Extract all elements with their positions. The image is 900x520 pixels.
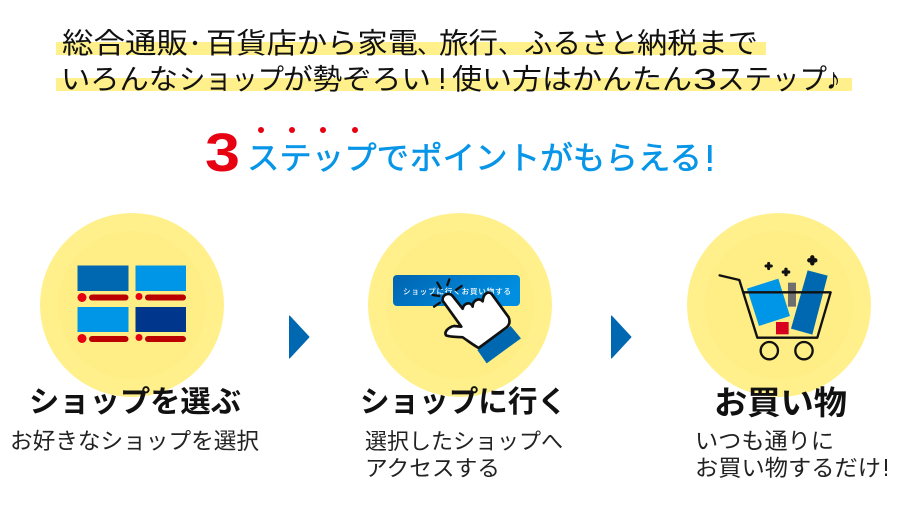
intro text with yellow highlights: 3 (693, 64, 717, 96)
intro text with yellow highlights: ステップ (717, 64, 827, 96)
intro text with yellow highlights: ショップ (179, 64, 284, 96)
icon: shopping cart (720, 257, 831, 359)
step 2 description: アクセスする (365, 456, 500, 481)
step 2 description: 選択したショップへ (365, 429, 563, 454)
arrow 2 (612, 316, 631, 358)
intro text with yellow highlights: 総合通販 (62, 28, 188, 60)
intro text with yellow highlights: 使い方はかんたん (452, 64, 692, 96)
icon: shop grid (78, 266, 186, 343)
heading: 3 steps: ステップで (247, 140, 409, 176)
intro text with yellow highlights: ♪ (826, 63, 841, 96)
step 2: yellow circle with click icon (368, 213, 552, 397)
button (393, 275, 520, 306)
intro text with yellow highlights: ふるさと (524, 28, 638, 60)
step 3 description: いつも通りに (695, 429, 834, 454)
heading: 3 steps: ポイントがもらえる (410, 140, 702, 176)
intro text with yellow highlights: 百貨店から家電 (206, 28, 418, 60)
intro text with yellow highlights: 納税まで (637, 28, 758, 60)
button: ショップに行くお買い物する (403, 286, 511, 296)
step 3 description (695, 429, 887, 481)
step 3 description: お買い物するだけ (695, 456, 881, 481)
step 2 description (365, 429, 563, 481)
icon: pointing hand (433, 279, 521, 363)
step 1 description: お好きなショップを選択 (10, 429, 259, 454)
step 1: yellow circle with shop grid icon (40, 213, 224, 397)
arrow 1 (290, 316, 309, 358)
intro text with yellow highlights: 、 (417, 32, 441, 59)
step 2 title: ショップに行く (360, 386, 567, 419)
intro text with yellow highlights: いろんな (61, 64, 178, 96)
intro text with yellow highlights (56, 28, 852, 96)
step 1 title: ショップを選ぶ (29, 386, 241, 419)
intro text with yellow highlights: 、 (498, 32, 522, 59)
intro text with yellow highlights: 旅行 (439, 28, 498, 60)
heading: 3 steps (205, 123, 712, 183)
step 3: yellow circle with cart icon (687, 213, 871, 397)
heading: 3 steps: 3 (205, 123, 240, 183)
step 3 title: お買い物 (714, 385, 847, 421)
intro text with yellow highlights: が勢ぞろい (283, 64, 431, 96)
